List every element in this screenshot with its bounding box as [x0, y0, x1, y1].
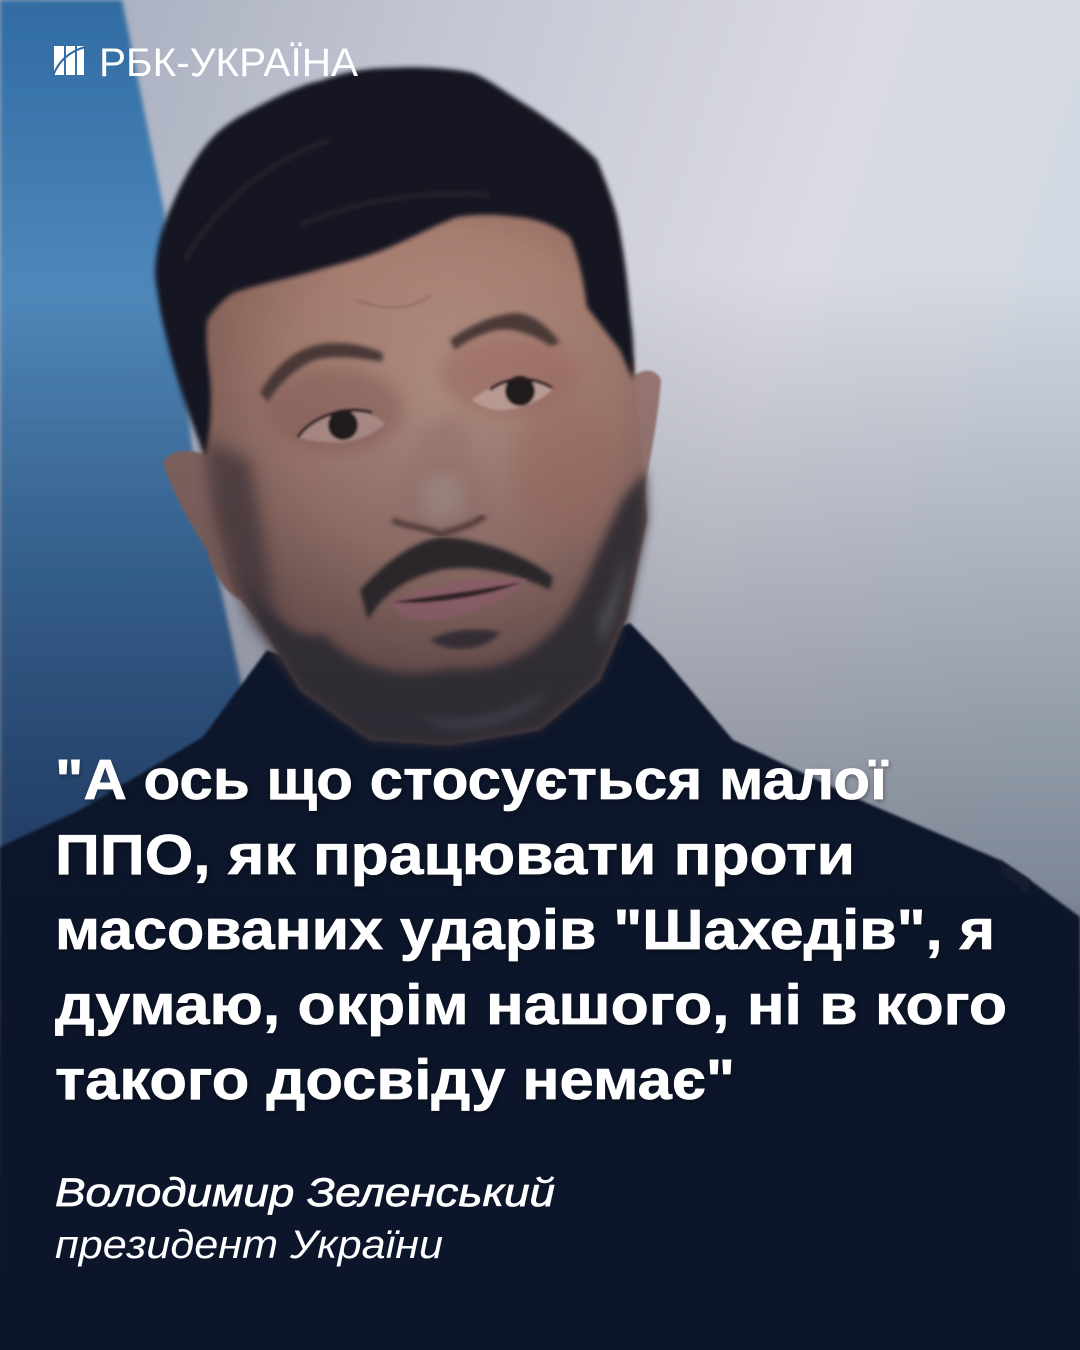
quote: масованих ударів "Шахедів", я [55, 898, 995, 962]
left eye socket [267, 368, 403, 452]
quote: такого досвіду немає" [55, 1048, 735, 1112]
logo mark [53, 46, 85, 76]
quote [55, 748, 1007, 1112]
quote: "А ось що стосується малої [55, 748, 889, 812]
jacket [0, 623, 1080, 1350]
mouth [390, 578, 527, 620]
quote: ППО, як працювати проти [55, 823, 855, 887]
right ear [628, 371, 661, 515]
moustache [360, 537, 553, 620]
jacket seam [1000, 860, 1030, 895]
right cheek warmth [515, 400, 615, 540]
attribution [55, 1171, 555, 1267]
speaker name: Володимир Зеленський [55, 1171, 555, 1215]
hair streaks [185, 140, 490, 260]
brow left [260, 343, 383, 402]
eye left [298, 410, 385, 443]
forehead wrinkle [355, 295, 430, 308]
beard [233, 470, 647, 747]
hair [155, 67, 634, 455]
soul patch [430, 630, 500, 649]
brow right [450, 313, 560, 350]
left ear [163, 451, 240, 600]
speaker role: президент України [55, 1223, 443, 1267]
left cheek shadow [205, 440, 300, 680]
logo wordmark: РБК-УКРАЇНА [99, 41, 358, 85]
eye right [472, 376, 552, 410]
quote: думаю, окрім нашого, ні в кого [55, 973, 1007, 1037]
nose [390, 410, 492, 535]
face [200, 180, 647, 745]
beard grey highlight [420, 550, 624, 727]
right eye socket [440, 335, 580, 415]
logo: РБК-Україна [53, 41, 358, 85]
